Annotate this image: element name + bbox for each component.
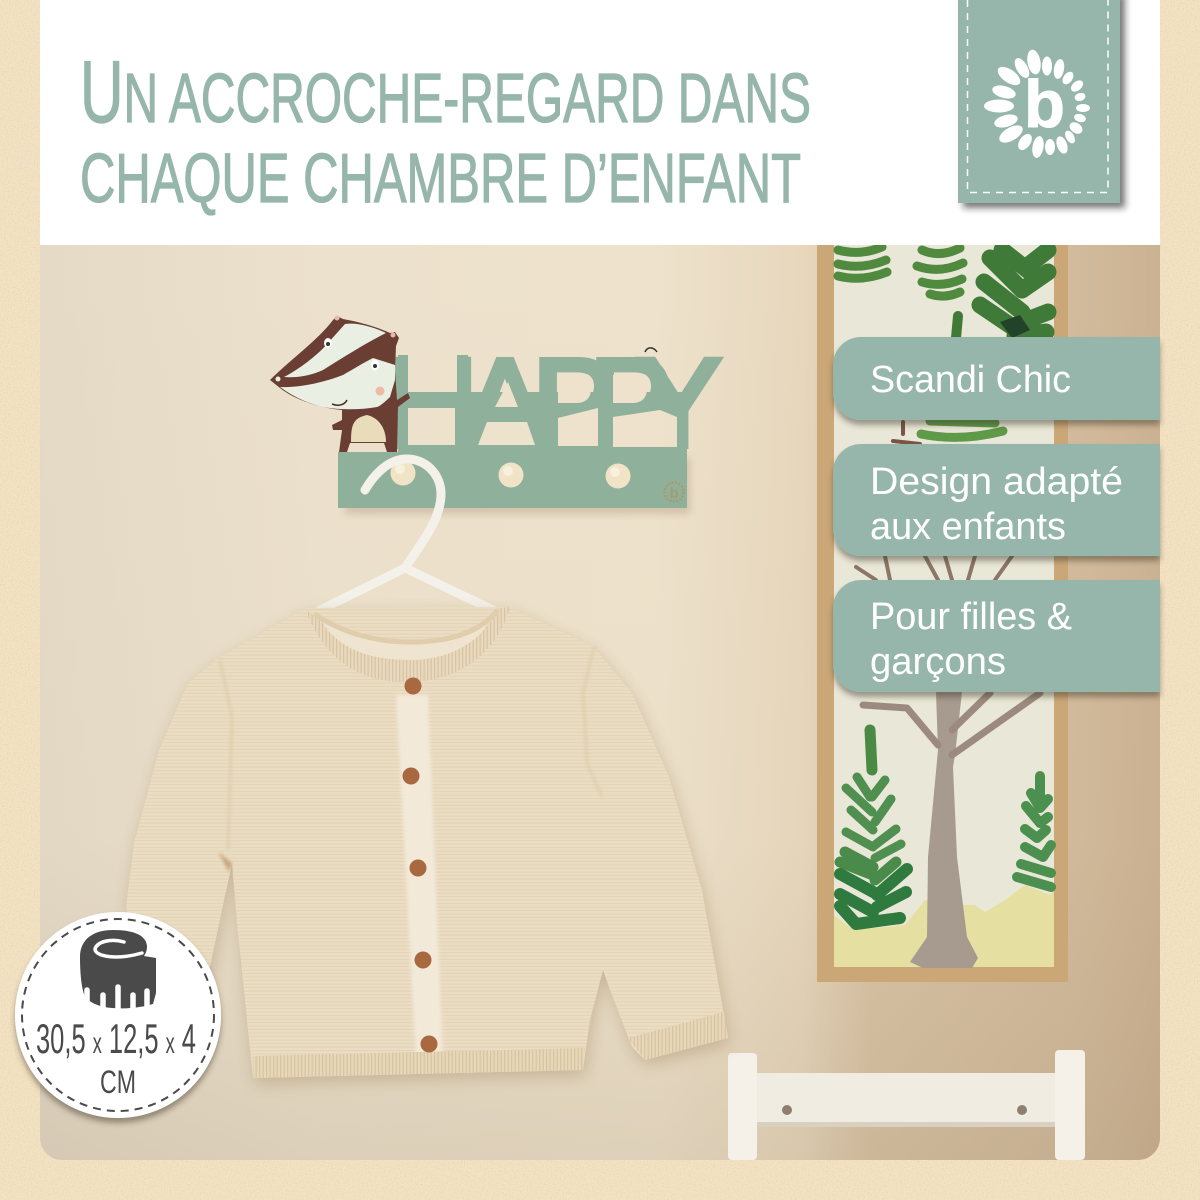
framed forest painting — [817, 245, 1068, 982]
feature pill: Scandi Chic — [833, 337, 1160, 420]
feature pill: Design adapté aux enfants: aux enfants — [870, 506, 1066, 548]
button 2 — [402, 768, 420, 784]
title line 1: UN ACCROCHE-REGARD DANS — [80, 42, 811, 141]
feature pill: Pour filles & garçons — [833, 580, 1160, 692]
chair back — [728, 1050, 1085, 1160]
feature pill: Design adapté aux enfants: Design adapté — [870, 461, 1123, 503]
title line 2: CHAQUE CHAMBRE D’ENFANT — [80, 139, 801, 217]
size text: 30,5 x 12,5 x 4 — [36, 1015, 196, 1062]
button 1 — [404, 678, 422, 694]
wall — [40, 245, 1160, 1160]
pine tree left — [840, 730, 907, 924]
feature pill: Pour filles & garçons: garçons — [870, 641, 1006, 683]
button 3 — [410, 860, 426, 876]
word HAPPY: HAPPY — [388, 334, 721, 473]
small logo on rack — [664, 482, 684, 502]
knob 3 — [606, 464, 630, 488]
header: white title band — [40, 0, 1160, 245]
main title — [80, 42, 811, 217]
photo: nursery wall scene — [40, 245, 1160, 1160]
unit text: CM — [100, 1064, 136, 1100]
knob 2 — [498, 462, 524, 488]
logo: flower with b: b — [1024, 67, 1065, 142]
cardigan — [126, 607, 730, 1084]
feature pill: Pour filles & garçons: Pour filles & — [870, 596, 1072, 638]
button 4 — [414, 952, 432, 968]
logo: flower with b — [984, 49, 1090, 159]
icon: tape measure roll — [80, 930, 156, 1012]
dimensions badge — [15, 912, 221, 1118]
brand tag — [958, 0, 1120, 203]
button 5 — [420, 1036, 438, 1052]
small logo on rack: b — [670, 485, 679, 502]
knob 1 — [390, 464, 416, 486]
feature pill: Scandi Chic: Scandi Chic — [870, 359, 1071, 401]
badger — [270, 316, 410, 452]
pine tree right — [1017, 776, 1051, 887]
coat rack with HAPPY letters — [338, 334, 721, 514]
feature pill: Design adapté aux enfants — [833, 444, 1160, 556]
tree trunk and branches — [863, 692, 1040, 968]
clothes hanger — [320, 459, 493, 610]
